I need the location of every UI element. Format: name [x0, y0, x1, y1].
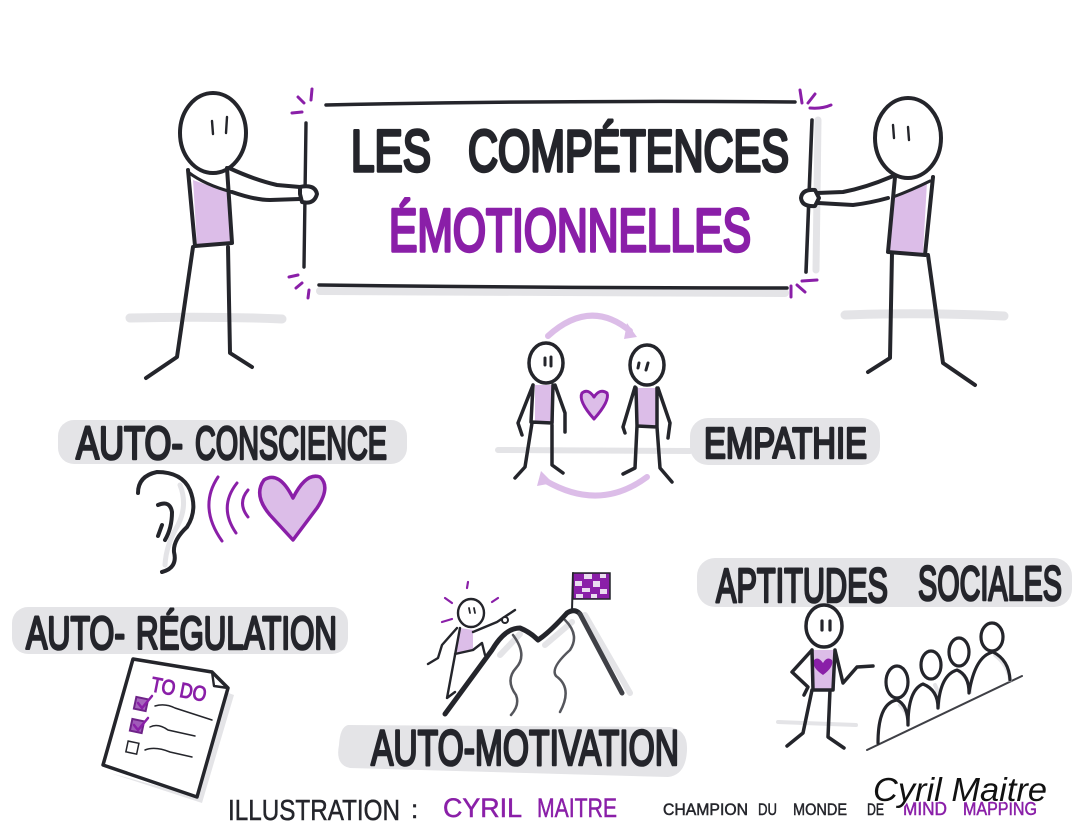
empathy illustration: [498, 316, 690, 496]
icon: small heart: [581, 391, 607, 419]
footer credit: MAITRE: [537, 793, 617, 823]
heading: aptitudes sociales: [697, 558, 1072, 613]
arrow: top lilac cycle arrow: [548, 316, 637, 339]
heading: auto-conscience: AUTO-: [76, 417, 183, 469]
title: COMPÉTENCES: [468, 119, 789, 184]
heading: auto-regulation: [12, 607, 348, 659]
heading: auto-regulation: RÉGULATION: [136, 607, 337, 659]
heading: auto-conscience: CONSCIENCE: [195, 417, 387, 469]
icon: to-do list: [103, 659, 234, 803]
footer credit: [228, 793, 1037, 825]
footer credit: MONDE: [793, 800, 847, 819]
icon: checkered flag: [572, 573, 610, 610]
title: [351, 119, 789, 264]
heading: auto-motivation: AUTO-MOTIVATION: [371, 720, 679, 776]
figure: presenter: [778, 605, 873, 748]
figure: right banner holder: [801, 98, 1004, 385]
icon: mountain with flag and climber: [428, 573, 630, 715]
footer credit: DU: [758, 800, 777, 819]
footer credit: :: [411, 794, 418, 824]
heading: auto-conscience: [58, 417, 407, 469]
title: ÉMOTIONNELLES: [389, 197, 751, 264]
footer credit: MIND: [903, 799, 947, 819]
title: LES: [351, 119, 431, 184]
figure: audience: [867, 623, 1022, 750]
footer credit: MAPPING: [963, 799, 1037, 819]
footer credit: DE: [867, 800, 884, 819]
figure: left banner holder: [130, 93, 317, 378]
watermark: Cyril Maitre: [873, 771, 1047, 808]
heading: empathie: EMPATHIE: [704, 419, 867, 468]
icon: ear listening to heart: [138, 472, 325, 572]
heading: aptitudes sociales: APTITUDES: [716, 560, 888, 613]
heading: auto-regulation: AUTO-: [26, 607, 125, 659]
heading: auto-motivation: [338, 720, 687, 777]
figure: right person: [623, 345, 672, 482]
icon: to-do list: TO DO: [149, 673, 208, 707]
footer credit: CHAMPION: [663, 800, 748, 819]
figure: left person: [515, 343, 565, 478]
arrow: bottom lilac cycle arrow: [537, 471, 647, 496]
footer credit: CYRIL: [443, 793, 522, 823]
figure: climber: [428, 582, 515, 698]
banner: [289, 89, 831, 298]
